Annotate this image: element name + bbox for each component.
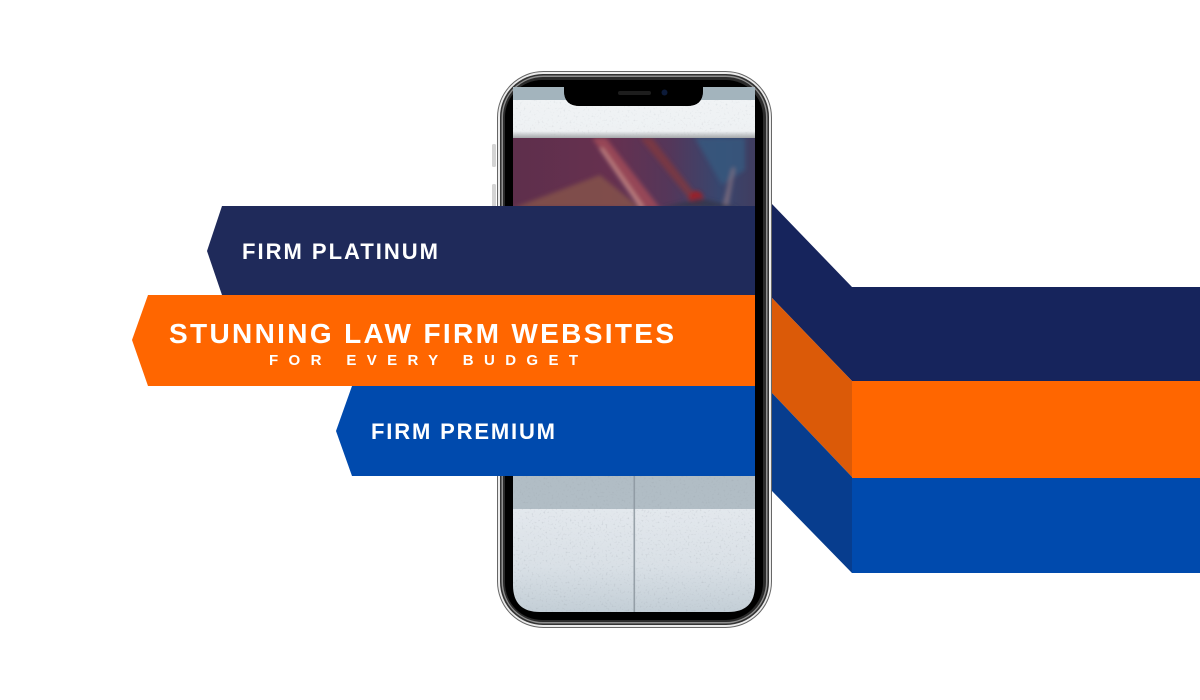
fold: navy: [772, 204, 852, 381]
label: Firm Premium: FIRM PREMIUM: [371, 419, 555, 444]
band: orange: [852, 381, 1200, 478]
screen: concrete floor: [513, 509, 755, 613]
headline: STUNNING LAW FIRM WEBSITES: [169, 318, 674, 349]
screen: abstract painting: [513, 138, 755, 208]
notch camera: [662, 90, 668, 96]
label: Firm Platinum: FIRM PLATINUM: [242, 239, 438, 264]
band: navy: [852, 287, 1200, 381]
screen: lower wall: [513, 476, 755, 509]
ribbon: right side folds: [772, 204, 1200, 573]
phone screen image: [513, 87, 755, 613]
phone notch: [564, 84, 703, 106]
screen: wall seam: [634, 470, 635, 613]
banner: Firm Platinum: [207, 206, 755, 295]
infographic canvas: [132, 71, 1200, 628]
screen: grey ceiling band: [513, 87, 755, 101]
fold: blue: [772, 393, 852, 573]
phone side buttons: [492, 144, 496, 207]
banner: headline: [132, 295, 755, 386]
subheading: FOR EVERY BUDGET: [269, 352, 578, 369]
phone body: [498, 72, 772, 628]
banner: Firm Premium: [336, 386, 755, 476]
screen: concrete grain: [513, 100, 755, 613]
band: blue: [852, 478, 1200, 573]
notch speaker: [618, 91, 651, 95]
fold: orange: [772, 298, 852, 477]
screen: concrete wall: [513, 100, 755, 138]
icon: smartphone: [492, 72, 772, 628]
